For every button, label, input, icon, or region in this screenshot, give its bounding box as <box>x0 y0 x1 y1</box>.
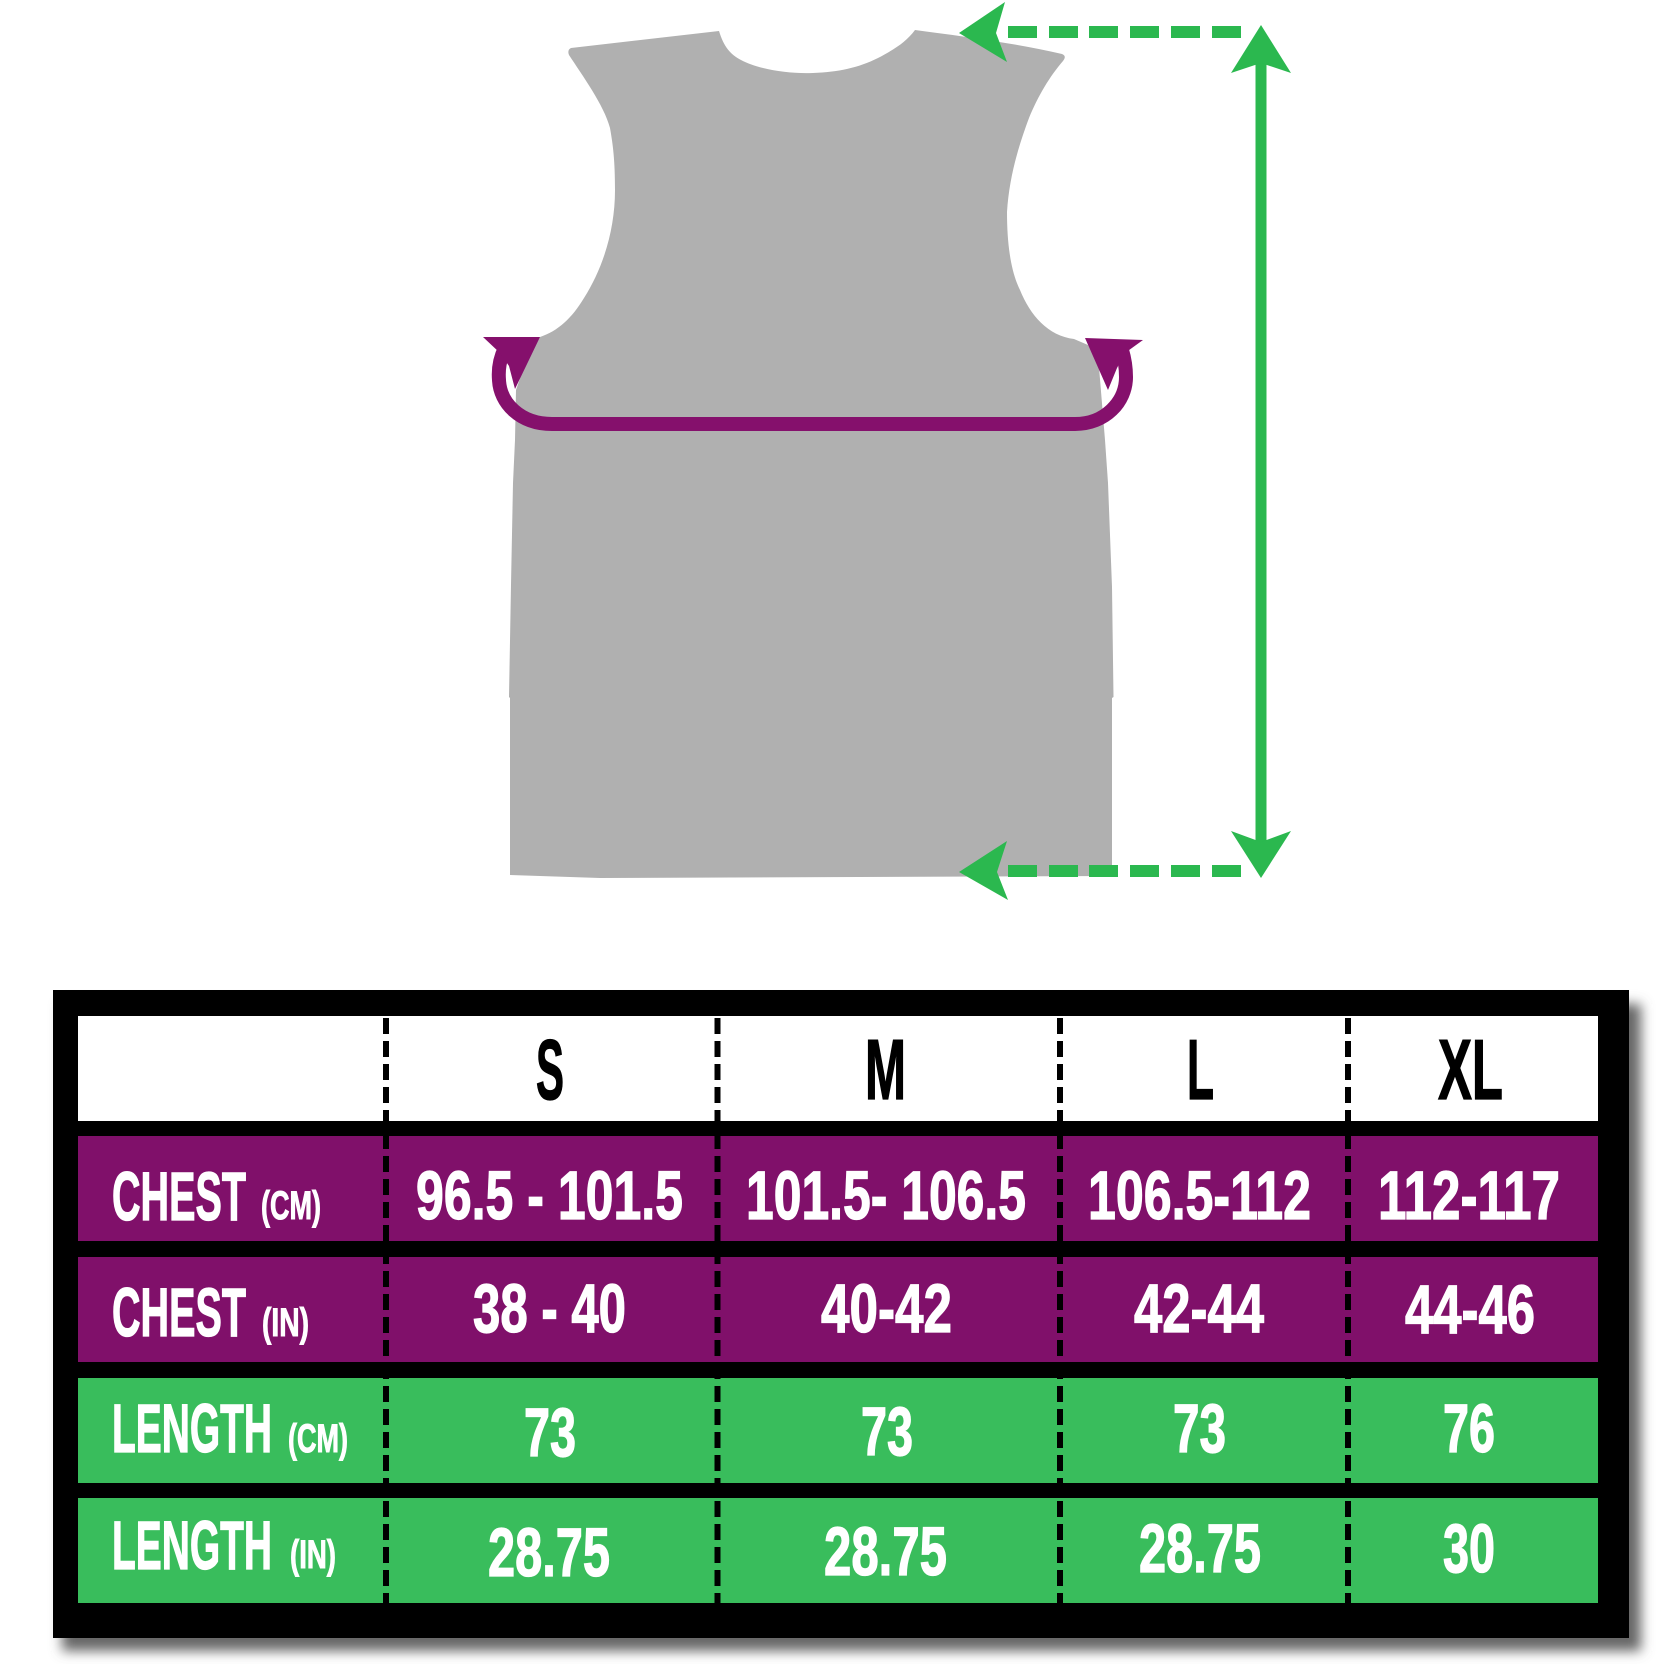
value XL: 112-117 <box>1378 1157 1560 1234</box>
header row <box>78 1016 1598 1121</box>
label: CHEST <box>112 1158 246 1235</box>
unit: (CM) <box>288 1417 348 1461</box>
value L: 28.75 <box>1139 1510 1261 1587</box>
value L: 42-44 <box>1134 1270 1264 1347</box>
unit: (CM) <box>261 1184 321 1228</box>
purple chest measurement arrow <box>483 337 1143 424</box>
bottom dashed guide with arrowhead <box>959 841 1241 900</box>
value M: 73 <box>861 1393 913 1470</box>
value M: 40-42 <box>821 1270 952 1347</box>
garment silhouette <box>509 30 1114 878</box>
value S: 28.75 <box>488 1514 610 1591</box>
value XL: 44-46 <box>1405 1271 1535 1348</box>
vertical double arrow <box>1231 25 1291 878</box>
value XL: 30 <box>1443 1510 1495 1587</box>
header row: S <box>536 1023 564 1118</box>
row: chest cm <box>78 1136 1598 1241</box>
value XL: 76 <box>1443 1390 1495 1467</box>
label: LENGTH <box>112 1507 272 1584</box>
size L: L <box>1187 1023 1214 1118</box>
value L: 106.5-112 <box>1088 1157 1311 1234</box>
value S: 96.5 - 101.5 <box>416 1157 683 1234</box>
label: LENGTH <box>112 1390 272 1467</box>
value S: 73 <box>524 1394 576 1471</box>
value L: 73 <box>1173 1390 1226 1467</box>
unit: (IN) <box>290 1533 336 1577</box>
value M: 101.5- 106.5 <box>746 1157 1026 1234</box>
row: length cm <box>78 1378 1598 1483</box>
value M: 28.75 <box>824 1513 947 1590</box>
size M: M <box>865 1023 906 1118</box>
size XL: XL <box>1438 1023 1503 1118</box>
top dashed guide with arrowhead <box>959 2 1241 62</box>
unit: (IN) <box>262 1301 309 1345</box>
value S: 38 - 40 <box>473 1270 626 1347</box>
label: CHEST <box>112 1274 246 1351</box>
size table panel <box>53 990 1641 1651</box>
row: length in <box>78 1498 1598 1603</box>
green length arrow <box>959 2 1291 900</box>
row: chest in <box>78 1257 1598 1362</box>
